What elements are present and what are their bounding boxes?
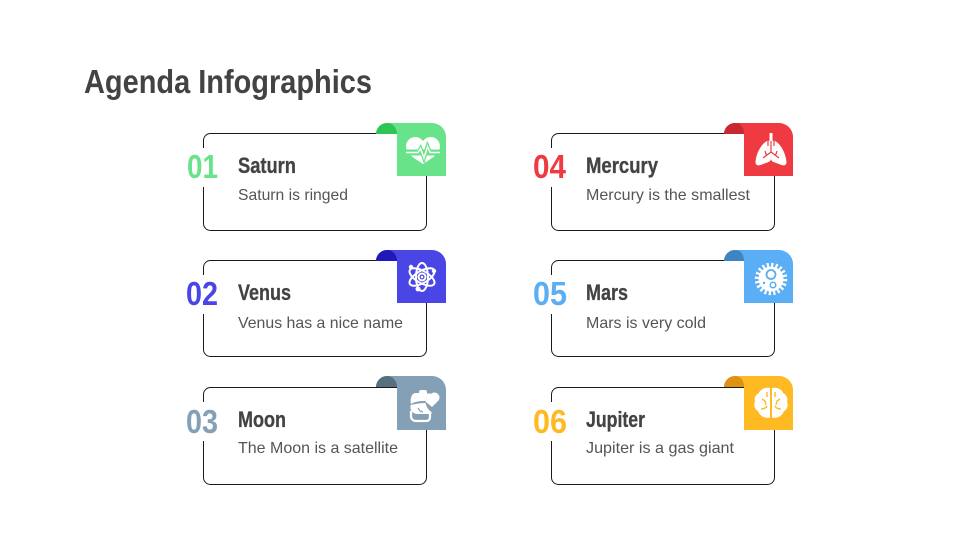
icon: bag with heart: [410, 390, 440, 421]
heading: Saturn: Saturn: [238, 153, 296, 178]
title: Agenda Infographics: [84, 63, 372, 100]
number 04: 04: [533, 148, 567, 185]
ribbon tab: [376, 123, 446, 176]
text: Mercury description: Mercury is the smallest: [586, 187, 751, 204]
ribbon tab: [724, 123, 793, 176]
heading: Moon: Moon: [238, 407, 286, 432]
ribbon tab: [376, 376, 446, 430]
icon: virus: [757, 265, 785, 293]
text: Saturn description: Saturn is ringed: [238, 187, 348, 204]
icon: atom: [407, 263, 437, 292]
icon: heart with pulse: [405, 137, 442, 164]
ribbon tab: [376, 250, 446, 303]
text: Venus description: Venus has a nice name: [238, 315, 403, 332]
number 03: 03: [186, 403, 218, 440]
ribbon tab: [724, 250, 793, 303]
icon: brain: [754, 388, 788, 418]
heading: Venus: Venus: [238, 280, 291, 305]
panel: 01 Saturn: [187, 123, 446, 230]
number 02: 02: [186, 275, 218, 312]
heading: Mercury: Mercury: [586, 153, 659, 178]
panel: 03 Moon: [186, 376, 446, 484]
panel: 04 Mercury: [533, 123, 793, 230]
card outline: [552, 260, 774, 356]
card outline: [204, 388, 426, 484]
number 05: 05: [533, 275, 567, 312]
ribbon tab: [724, 376, 793, 430]
number 06: 06: [533, 403, 567, 440]
panel: 02 Venus: [186, 250, 446, 356]
icon: lungs: [756, 133, 786, 165]
number 01: 01: [187, 148, 218, 185]
card outline: [204, 134, 426, 230]
card outline: [204, 260, 426, 356]
panel: 05 Mars: [533, 250, 793, 356]
heading: Mars: Mars: [586, 280, 628, 305]
text: Jupiter description: Jupiter is a gas giant: [586, 440, 735, 457]
text: Moon description: The Moon is a satellite: [238, 440, 398, 457]
card outline: [552, 388, 774, 484]
heading: Jupiter: Jupiter: [586, 407, 645, 432]
panel: 06 Jupiter: [533, 376, 793, 484]
text: Mars description: Mars is very cold: [586, 315, 706, 332]
card outline: [552, 134, 774, 230]
